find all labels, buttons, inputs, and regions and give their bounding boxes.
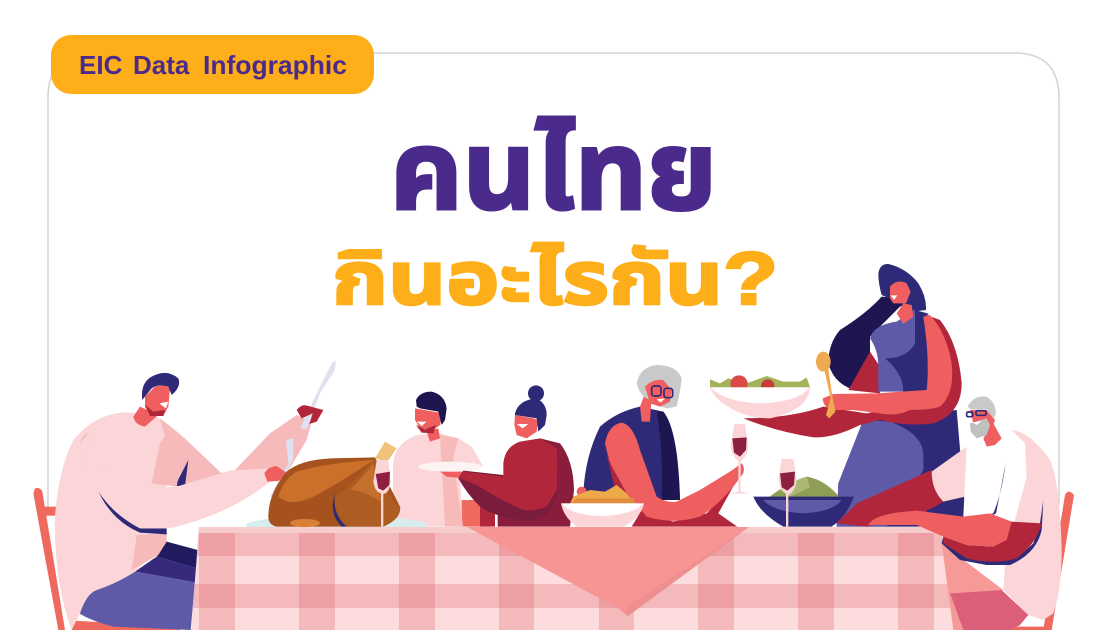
illustration: grandmother raising a glass bbox=[577, 365, 744, 527]
badge: EIC Data Infographic: EIC bbox=[79, 50, 123, 80]
subtitle: กินอะไรกัน?: กินอะไรกัน? bbox=[332, 237, 778, 320]
badge: EIC Data Infographic bbox=[51, 35, 374, 94]
illustration: man carving the turkey bbox=[33, 361, 336, 630]
illustration: grandmother's wine glass bbox=[728, 424, 749, 494]
illustration: turkey on the platter bbox=[246, 442, 427, 534]
illustration: grandfather at the right of the table bbox=[837, 396, 1074, 630]
illustration: salad bowl on the table bbox=[753, 459, 854, 527]
title: คนไทย: คนไทย bbox=[390, 110, 717, 233]
badge: EIC Data Infographic: Infographic bbox=[203, 50, 347, 80]
illustration: wine glass by the turkey bbox=[373, 460, 391, 527]
tablecloth bbox=[190, 527, 970, 630]
illustration: boy holding a plate bbox=[393, 392, 495, 527]
illustration: girl with hair bun bbox=[458, 385, 574, 527]
badge: EIC Data Infographic: Data bbox=[133, 50, 190, 80]
illustration: mother serving salad bbox=[710, 264, 967, 527]
illustration: bread bowl bbox=[561, 485, 644, 527]
